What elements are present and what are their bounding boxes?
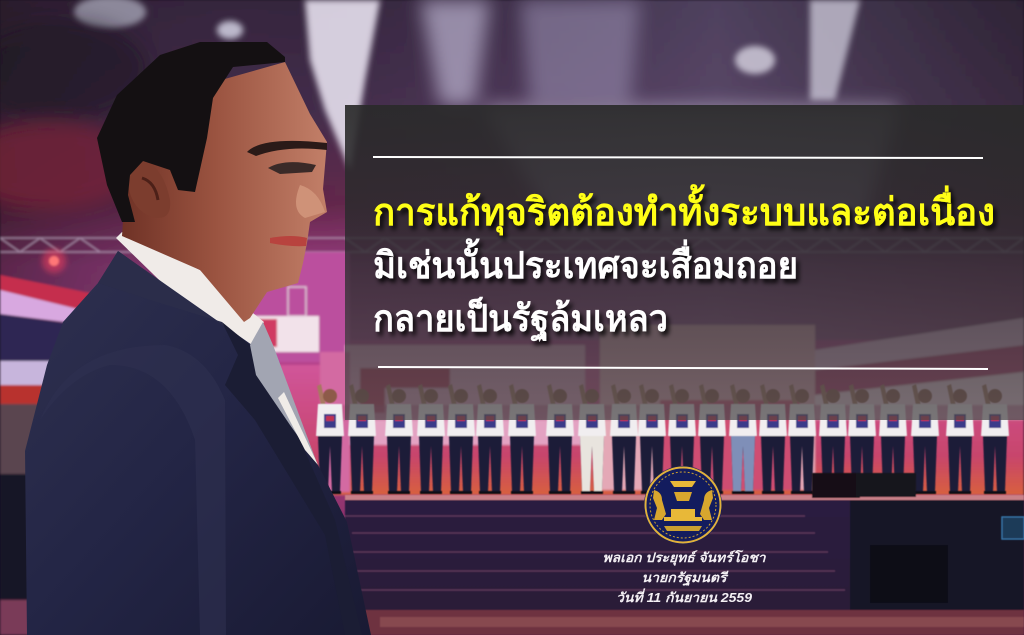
signature block: พลเอก ประยุทธ์ จันทร์โอชา xyxy=(602,549,766,566)
bottom rule xyxy=(378,367,988,369)
tie xyxy=(250,322,317,463)
second line: มิเช่นนั้นประเทศจะเสื่อมถอย xyxy=(373,238,798,286)
icon: government emblem xyxy=(644,466,722,544)
stage steps xyxy=(345,473,1024,635)
third line: กลายเป็นรัฐล้มเหลว xyxy=(373,295,668,342)
portrait: man in dark suit xyxy=(25,42,371,635)
row of people on stage xyxy=(316,384,1009,494)
face xyxy=(122,62,327,322)
signature block xyxy=(602,549,766,605)
signature block: นายกรัฐมนตรี xyxy=(642,570,729,587)
neck and shirt collar xyxy=(116,232,264,350)
headline in yellow: การแก้ทุจริตต้องทำทั้งระบบและต่อเนื่อง xyxy=(373,184,995,236)
jacket xyxy=(25,251,371,635)
top rule xyxy=(373,157,983,158)
signature block: วันที่ 11 กันยายน 2559 xyxy=(616,588,753,605)
hair xyxy=(97,42,285,222)
translucent text panel xyxy=(345,105,1024,420)
ear xyxy=(128,161,170,218)
